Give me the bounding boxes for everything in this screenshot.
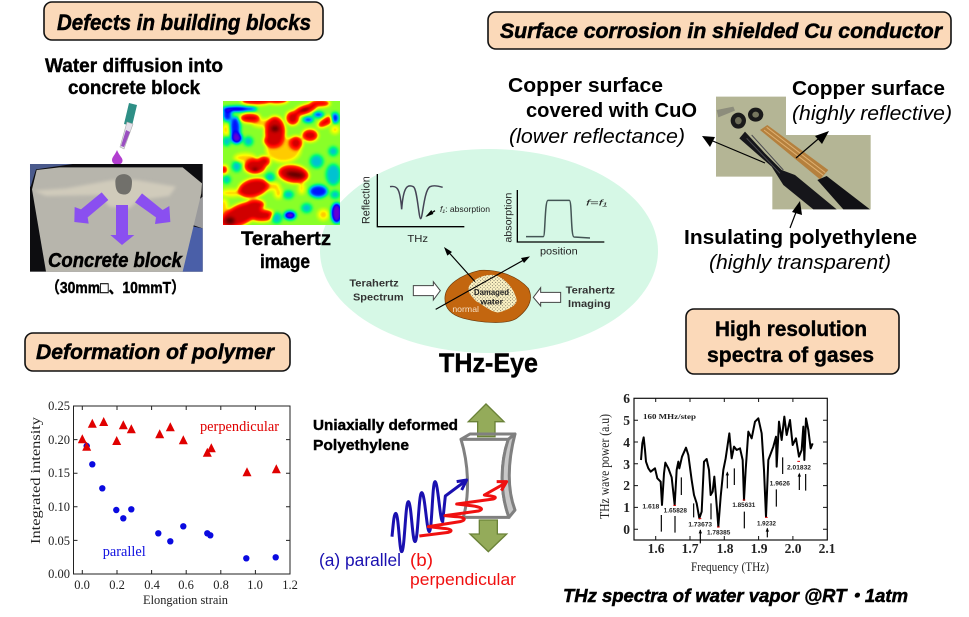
scatter chart: integrated intensity vs elongation strain: 0.10 [48, 500, 70, 514]
line chart: THz spectrum of water vapor: 1.65828 [664, 508, 687, 515]
arrow: transmitted beam [436, 256, 530, 309]
line chart: THz spectrum of water vapor: 1 [623, 500, 630, 515]
callout: insulating polyethylene [684, 226, 917, 274]
chart: absorption vs position: position [540, 247, 578, 258]
scatter chart: integrated intensity vs elongation strain: 1.0 [247, 578, 263, 592]
heading: Surface corrosion in shielded Cu conductor [488, 12, 951, 49]
tissue cross-section: water [479, 298, 503, 307]
tissue cross-section [445, 270, 531, 323]
scatter chart: integrated intensity vs elongation strain: 1.2 [282, 578, 298, 592]
arrow: Terahertz Imaging input [533, 288, 561, 306]
caption: water diffusion into concrete block: concrete block [68, 78, 200, 99]
callouts: copper surface covered with CuO: Copper surface [508, 74, 663, 97]
label: Terahertz Spectrum [349, 279, 404, 304]
label: Terahertz image: Terahertz [241, 229, 331, 250]
line chart: THz spectrum of water vapor: Frequency (THz) [691, 560, 769, 574]
heading: Surface corrosion in shielded Cu conductor: Surface corrosion in shielded Cu conductor [500, 20, 944, 43]
line chart: THz spectrum of water vapor: 2.01832 [787, 464, 812, 471]
diagram: uniaxially deformed polyethylene [313, 404, 516, 589]
caption: water diffusion into concrete block [45, 56, 223, 99]
heading: High resolution spectra of gases: spectra of gases [707, 344, 874, 367]
line chart: THz spectrum of water vapor: 2 [623, 478, 630, 493]
caption: water diffusion into concrete block: Water diffusion into [45, 56, 223, 77]
scatter chart: integrated intensity vs elongation strain: 0.0 [74, 578, 90, 592]
label: Uniaxially deformed Polyethylene [313, 417, 458, 454]
heading: Deformation of polymer [25, 333, 290, 371]
heading: Deformation of polymer: Deformation of polymer [36, 341, 276, 364]
line chart: THz spectrum of water vapor: 1.7 [682, 541, 699, 556]
line chart: THz spectrum of water vapor: THz wave power (a.u) [597, 414, 612, 519]
tissue cross-section: Damaged [474, 288, 509, 297]
label: (a) parallel: (a) parallel [319, 550, 401, 570]
heading: Defects in building blocks: Defects in building blocks [57, 10, 311, 35]
label: Terahertz Imaging [566, 285, 615, 310]
label: Terahertz Spectrum: Spectrum [353, 293, 404, 304]
label: (b) perpendicular [410, 550, 516, 589]
label: block dimensions: （30mm□、10mmT） [46, 279, 185, 297]
caption: THz spectra of water vapor: THz spectra of water vapor @RT・1atm [563, 586, 908, 606]
chart: reflection spectrum: Reflection [360, 176, 372, 224]
callout: insulating polyethylene: Insulating polyethylene [684, 226, 917, 249]
label: (b) perpendicular: perpendicular [410, 570, 516, 589]
line chart: THz spectrum of water vapor: 1.8 [717, 541, 734, 556]
heading: High resolution spectra of gases [686, 309, 899, 374]
line chart: THz spectrum of water vapor [597, 391, 836, 574]
line chart: THz spectrum of water vapor: 5 [623, 413, 630, 428]
line chart: THz spectrum of water vapor: 4 [623, 435, 630, 450]
line chart: THz spectrum of water vapor: 3 [623, 457, 630, 472]
label: Uniaxially deformed Polyethylene: Uniaxially deformed [313, 417, 458, 434]
chart: absorption vs position: f=f₁ [586, 197, 608, 207]
callout: copper surface highly reflective [792, 77, 952, 125]
label: Terahertz Spectrum: Terahertz [349, 279, 399, 290]
central ellipse: THz-Eye background [320, 149, 658, 353]
line chart: THz spectrum of water vapor: 1.9 [751, 541, 768, 556]
scatter chart: integrated intensity vs elongation strain: 0.00 [48, 567, 70, 581]
arrow: water diffusing down [110, 205, 134, 245]
tissue cross-section: normal [452, 304, 479, 314]
terahertz image heat map [223, 101, 340, 225]
scatter chart: integrated intensity vs elongation strain: Integrated intensity [29, 417, 44, 544]
scatter chart: integrated intensity vs elongation strain: 0.6 [178, 578, 194, 592]
line chart: THz spectrum of water vapor: 1.9232 [757, 520, 776, 527]
label: Terahertz image: image [260, 252, 310, 273]
callouts: copper surface covered with CuO [508, 74, 697, 148]
arrow: water diffusing left [74, 192, 108, 224]
callout: copper surface highly reflective: Copper surface [792, 77, 945, 100]
chart: reflection spectrum: f₁: absorption [440, 204, 490, 214]
wave: perpendicular polarization [419, 482, 507, 536]
photo: shielded copper cable [716, 97, 871, 209]
scatter chart: integrated intensity vs elongation strain: Elongation strain [143, 593, 229, 607]
label: (b) perpendicular: (b) [410, 550, 433, 570]
line chart: THz spectrum of water vapor: 0 [623, 522, 630, 537]
label: Uniaxially deformed Polyethylene: Polyethylene [313, 437, 409, 454]
chart: reflection spectrum: THz [407, 234, 428, 245]
scatter chart: integrated intensity vs elongation strain: perpendicular [200, 419, 279, 435]
scatter chart: integrated intensity vs elongation strain: 0.4 [144, 578, 161, 592]
chart: absorption vs position: absorption [503, 192, 514, 243]
line chart: THz spectrum of water vapor: 1.6 [648, 541, 665, 556]
scatter chart: integrated intensity vs elongation strain: 0.2 [109, 578, 125, 592]
heading: Defects in building blocks [44, 2, 323, 40]
line chart: THz spectrum of water vapor: 6 [623, 391, 630, 406]
diagram: THz-Eye concept [349, 174, 615, 323]
scatter chart: integrated intensity vs elongation strain: 0.05 [48, 534, 70, 548]
icon: purple dropper [112, 103, 137, 165]
heading: High resolution spectra of gases: High resolution [715, 318, 867, 341]
callout: insulating polyethylene: (highly transparent) [709, 251, 891, 274]
scatter chart: integrated intensity vs elongation strain: 0.8 [213, 578, 229, 592]
callout: copper surface highly reflective: (highly reflective) [792, 102, 952, 125]
scatter chart: integrated intensity vs elongation strain [29, 399, 298, 607]
arrow: reflected beam [444, 247, 475, 282]
line chart: THz spectrum of water vapor: 1.78385 [707, 529, 731, 536]
arrow: stretch down [470, 520, 507, 552]
label: Terahertz Imaging: Terahertz [566, 285, 615, 296]
line chart: THz spectrum of water vapor: 2.0 [785, 541, 802, 556]
arrows: cable callout pointers [702, 131, 829, 228]
label: Concrete block: Concrete block [48, 250, 183, 272]
callouts: copper surface covered with CuO: (lower reflectance) [509, 125, 685, 148]
line chart: THz spectrum of water vapor: 2.1 [819, 541, 836, 556]
chart: reflection spectrum [360, 174, 490, 245]
scatter chart: integrated intensity vs elongation strain: 0.20 [48, 433, 70, 447]
arrow: stretch up [468, 404, 504, 437]
arrow: Terahertz Spectrum input [413, 282, 440, 300]
line chart: THz spectrum of water vapor: 1.73673 [688, 521, 712, 528]
label: Terahertz Imaging: Imaging [568, 299, 611, 310]
chart: absorption vs position [503, 190, 608, 258]
label: Terahertz image [241, 229, 331, 273]
stretched polyethylene film [461, 434, 515, 517]
title: THz-Eye: THz-Eye [439, 348, 538, 378]
wave: parallel polarization [392, 480, 467, 552]
scatter chart: integrated intensity vs elongation strain: 0.25 [48, 399, 70, 413]
line chart: THz spectrum of water vapor: 1.9626 [770, 480, 790, 487]
scatter chart: integrated intensity vs elongation strain: parallel [103, 544, 146, 560]
scatter chart: integrated intensity vs elongation strain: 0.15 [48, 466, 70, 480]
line chart: THz spectrum of water vapor: 1.618 [642, 503, 660, 510]
photo: concrete block [30, 164, 203, 272]
line chart: THz spectrum of water vapor: 160 MHz/step [643, 412, 696, 421]
arrow: water diffusing right [135, 193, 170, 224]
line chart: THz spectrum of water vapor: 1.85631 [732, 502, 756, 509]
callouts: copper surface covered with CuO: covered with CuO [526, 99, 697, 122]
